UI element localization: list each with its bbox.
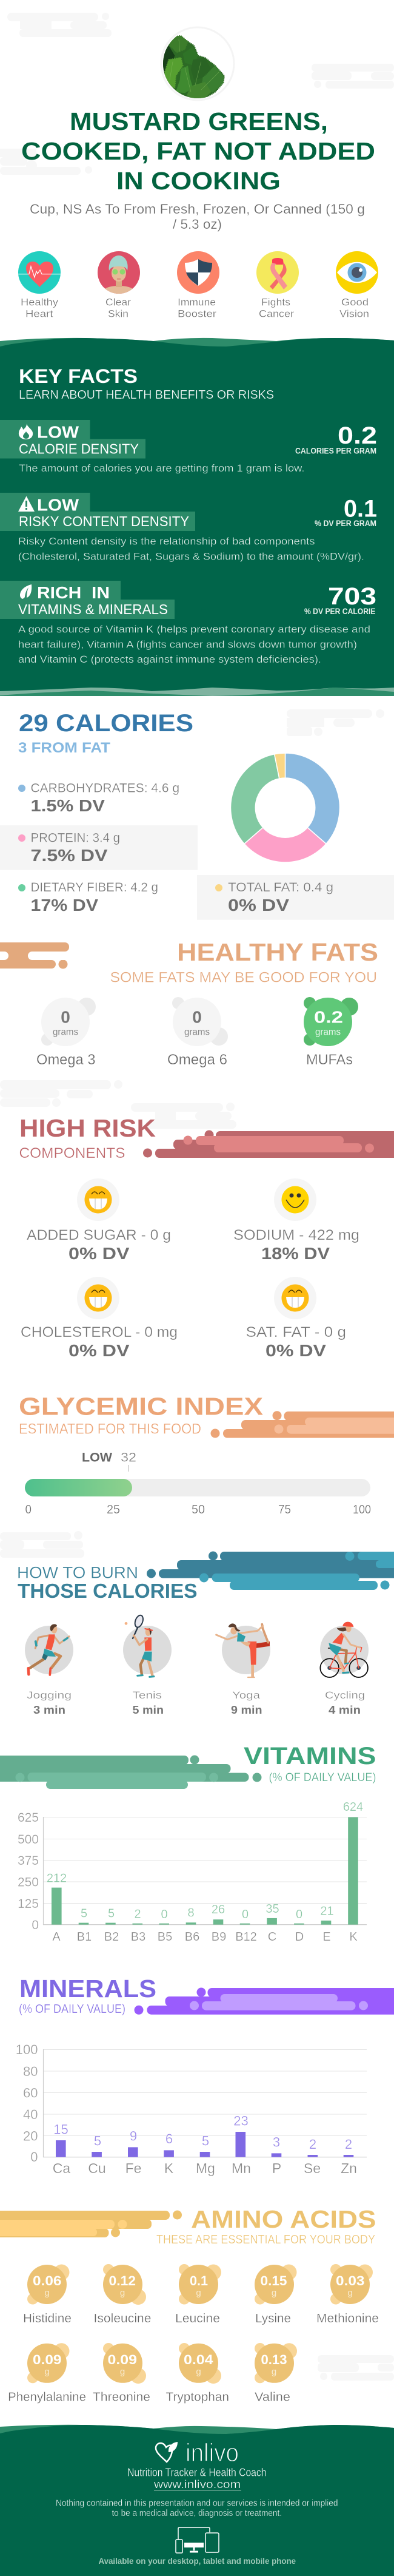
activity: jogging	[25, 1624, 73, 1675]
fact: low risky content density: RISKY CONTENT DENSITY	[19, 513, 189, 529]
bar chart: vitamins: D	[295, 1930, 304, 1944]
fat bubble: MUFAs: grams	[315, 1027, 341, 1038]
label: immune booster: Booster	[178, 308, 217, 319]
fat bubble: MUFAs: MUFAs	[306, 1052, 353, 1068]
fat bubble: omega 3: grams	[53, 1027, 78, 1038]
decorative header shape: vitamins	[0, 1755, 262, 1789]
fact: low calorie density: The amount of calories you are getting from 1 gram is low.	[19, 463, 304, 474]
amino acid: phenylalanine	[8, 2343, 86, 2404]
legend: protein: PROTEIN: 3.4 g	[30, 831, 120, 845]
icon: immune booster	[177, 251, 219, 294]
label: yoga	[231, 1689, 262, 1716]
bar chart: vitamins: C	[268, 1930, 276, 1944]
icon: healthy heart	[18, 251, 61, 294]
risk item: saturated fat: SAT. FAT - 0 g	[246, 1324, 346, 1340]
bar chart: vitamins: B12	[235, 1930, 257, 1944]
bar chart: minerals: 15	[53, 2122, 68, 2137]
heading: glycemic index: ESTIMATED FOR THIS FOOD	[19, 1421, 201, 1438]
bar chart: vitamins: B3	[131, 1930, 145, 1944]
bar chart: minerals	[16, 2042, 367, 2176]
risk item: added sugar	[27, 1178, 171, 1263]
bar chart: minerals: 6	[165, 2131, 173, 2146]
amino acid: phenylalanine: Phenylalanine	[8, 2391, 86, 2404]
amino acid: isoleucine: Isoleucine	[93, 2312, 152, 2325]
bar chart: minerals: 5	[202, 2134, 209, 2149]
bar chart: vitamins: 21	[320, 1904, 334, 1918]
amino acid: methionine: 0.03	[336, 2273, 365, 2288]
heading: 29 calories: 29 CALORIES	[19, 710, 193, 737]
amino acid: leucine: g	[196, 2288, 201, 2298]
label: good vision: Vision	[339, 308, 369, 319]
legend: dietary fiber: DIETARY FIBER: 4.2 g	[30, 881, 158, 894]
fact: low calorie density: 0.2	[338, 422, 377, 449]
label: immune booster	[178, 297, 217, 319]
bar chart: vitamins: 0	[242, 1908, 249, 1921]
footer tagline and link: Nutrition Tracker & Health Coach	[127, 2466, 267, 2478]
bar chart: vitamins: 0	[32, 1918, 39, 1932]
bar chart: vitamins: B9	[212, 1930, 226, 1944]
fact: low calorie density: CALORIES PER GRAM	[295, 447, 376, 455]
fact: rich in vitamins and minerals: 703	[328, 583, 376, 610]
fat bubble: MUFAs	[304, 997, 358, 1068]
heading: glycemic index: GLYCEMIC INDEX	[19, 1393, 263, 1421]
label: yoga: 9 min	[231, 1704, 262, 1716]
fat bubble: omega 6: grams	[184, 1027, 210, 1038]
heading: key facts: LEARN ABOUT HEALTH BENEFITS OR RISKS	[19, 388, 274, 402]
logo: inlivo	[156, 2438, 239, 2467]
bar chart: minerals: Se	[304, 2160, 321, 2176]
label: cycling: Cycling	[325, 1689, 365, 1701]
gauge: glycemic index value: 100	[353, 1503, 371, 1516]
fact: low risky content density	[0, 493, 377, 562]
bar chart: minerals: 20	[23, 2129, 38, 2143]
amino acid: lysine: g	[272, 2288, 276, 2298]
label: good vision: Good	[341, 297, 369, 308]
bar chart: vitamins: 375	[18, 1854, 39, 1868]
amino acid: isoleucine	[93, 2264, 152, 2325]
risk item: cholesterol: 0% DV	[68, 1341, 130, 1360]
label: jogging	[27, 1689, 72, 1716]
bar chart: vitamins: E	[322, 1930, 331, 1944]
bar chart: vitamins: 35	[265, 1902, 279, 1916]
disclaimer: to be a medical advice, diagnosis or treatment.	[112, 2509, 282, 2518]
heading: vitamins	[244, 1743, 376, 1784]
fat bubble: omega 3: Omega 3	[36, 1052, 96, 1068]
fat bubble: omega 3: 0	[61, 1008, 70, 1027]
bar chart: vitamins: 5	[108, 1907, 115, 1920]
amino acid: leucine: Leucine	[175, 2312, 220, 2325]
bar chart: minerals: 40	[23, 2107, 38, 2122]
amino acid: histidine	[23, 2265, 72, 2325]
fat bubble: omega 6: Omega 6	[167, 1052, 227, 1068]
fat bubble: MUFAs: 0.2	[314, 1008, 343, 1027]
amino acid: histidine: Histidine	[23, 2312, 72, 2325]
legend: protein	[0, 825, 198, 870]
label: healthy heart: Heart	[25, 308, 53, 319]
heading: amino acids	[156, 2205, 376, 2246]
label: cycling: 4 min	[329, 1704, 361, 1716]
risk item: sodium: SODIUM - 422 mg	[233, 1227, 359, 1243]
risk item: cholesterol: CHOLESTEROL - 0 mg	[21, 1324, 178, 1340]
gauge: glycemic index value: 0	[25, 1503, 32, 1516]
fact: rich in vitamins and minerals: RICH IN	[37, 583, 110, 602]
amino acid: isoleucine: g	[120, 2288, 125, 2298]
panel: key facts	[0, 338, 394, 696]
decorative header shape: amino acids	[0, 2210, 182, 2237]
donut chart: calorie sources	[231, 753, 339, 862]
fact: low calorie density: LOW	[37, 422, 79, 442]
panel: footer	[0, 2425, 394, 2576]
decorative header shape: high risk	[143, 1130, 394, 1158]
bar chart: minerals: P	[272, 2160, 281, 2176]
bar chart: minerals: 0	[30, 2149, 38, 2165]
bar chart: minerals: 23	[233, 2114, 249, 2129]
fact: low calorie density: CALORIE DENSITY	[19, 441, 139, 456]
disclaimer	[56, 2499, 338, 2518]
title: IN COOKING	[116, 167, 281, 195]
bar chart: vitamins: 8	[187, 1907, 195, 1920]
amino acid: valine: Valine	[255, 2391, 290, 2404]
bar chart: minerals: 2	[345, 2137, 352, 2152]
subtitle: serving size: Cup, NS As To From Fresh, Frozen, Or Canned (150 g	[30, 201, 365, 217]
label: tennis	[132, 1689, 164, 1716]
label: good vision	[339, 297, 369, 319]
amino acid: tryptophan: g	[196, 2367, 201, 2377]
amino acid: methionine: Methionine	[316, 2312, 379, 2325]
bar chart: vitamins: 26	[212, 1903, 225, 1916]
amino acid: lysine: Lysine	[255, 2312, 291, 2325]
gauge: glycemic index value: LOW	[82, 1451, 112, 1465]
food photo: mustard greens	[161, 27, 234, 100]
legend: total fat: 0% DV	[228, 896, 289, 914]
legend: protein: 7.5% DV	[30, 846, 108, 865]
amino acid: threonine	[93, 2343, 150, 2404]
risk item: sodium	[233, 1178, 359, 1263]
fat bubble: omega 3	[36, 998, 96, 1068]
bar chart: minerals: 100	[16, 2042, 38, 2057]
fact: rich in vitamins and minerals: heart failure), Vitamin A (fights cancer and slows down tumor growth)	[18, 640, 357, 651]
gauge: glycemic index value: 50	[192, 1503, 205, 1516]
bar chart: vitamins: 125	[18, 1897, 39, 1911]
amino acid: phenylalanine: g	[44, 2367, 50, 2377]
heading: high risk	[19, 1114, 156, 1161]
label: clear skin: Clear	[105, 297, 132, 308]
amino acid: valine: g	[272, 2367, 276, 2377]
title: COOKED, FAT NOT ADDED	[21, 137, 375, 165]
label: clear skin	[105, 297, 132, 319]
risk item: added sugar: 0% DV	[68, 1244, 130, 1263]
heading: key facts: KEY FACTS	[19, 365, 138, 387]
fact: rich in vitamins and minerals: VITAMINS & MINERALS	[18, 601, 168, 617]
bar chart: minerals: 60	[23, 2085, 38, 2101]
risk item: saturated fat: 0% DV	[265, 1341, 326, 1360]
heading: healthy fats: HEALTHY FATS	[177, 938, 378, 966]
fact: low risky content density: % DV PER GRAM	[315, 519, 376, 528]
label: clear skin: Skin	[108, 308, 129, 319]
legend: carbohydrates	[18, 782, 179, 815]
bar chart: minerals: Fe	[125, 2160, 141, 2176]
bar chart: minerals: 9	[130, 2129, 137, 2144]
fact: rich in vitamins and minerals	[0, 581, 376, 665]
fact: low risky content density: (Cholesterol, Saturated Fat, Sugars & Sodium) to the amount (%DV/gr).	[18, 551, 364, 562]
heading: high risk: HIGH RISK	[19, 1114, 156, 1142]
activity: cycling	[320, 1622, 369, 1677]
label: tennis: Tenis	[132, 1689, 162, 1701]
heading: how to burn those calories	[17, 1563, 198, 1602]
legend: carbohydrates: CARBOHYDRATES: 4.6 g	[30, 782, 179, 796]
amino acid: threonine: 0.09	[108, 2352, 137, 2367]
heading: amino acids: THESE ARE ESSENTIAL FOR YOUR BODY	[156, 2233, 375, 2246]
gauge: glycemic index value: 32	[121, 1451, 136, 1465]
decorative header shape: glycemic index	[211, 1411, 394, 1438]
amino acid: leucine	[175, 2264, 221, 2325]
heading: how to burn those calories: THOSE CALORIES	[18, 1580, 198, 1602]
fat bubble: omega 6	[167, 997, 228, 1068]
label: jogging: Jogging	[27, 1689, 72, 1701]
label: fights cancer: Cancer	[259, 308, 295, 319]
amino acid: histidine: g	[44, 2288, 50, 2298]
amino acid: leucine: 0.1	[190, 2273, 208, 2288]
decorative header shape: healthy fats	[0, 942, 76, 969]
heading: vitamins: (% OF DAILY VALUE)	[269, 1771, 376, 1784]
subtitle: serving size	[30, 201, 365, 232]
bar chart: vitamins: 5	[81, 1907, 87, 1920]
amino acid: lysine	[255, 2265, 297, 2325]
decorative header shape: how to burn	[147, 1551, 394, 1590]
label: tennis: 5 min	[132, 1704, 164, 1716]
heading: healthy fats: SOME FATS MAY BE GOOD FOR YOU	[110, 970, 377, 986]
legend: total fat: TOTAL FAT: 0.4 g	[228, 881, 333, 894]
gauge: glycemic index value	[25, 1451, 371, 1516]
heading: high risk: COMPONENTS	[19, 1145, 125, 1161]
heading: minerals: (% OF DAILY VALUE)	[19, 2003, 125, 2016]
icon: fights cancer	[256, 251, 299, 294]
label: cycling	[325, 1689, 365, 1716]
bar chart: vitamins: A	[52, 1930, 61, 1944]
fact: rich in vitamins and minerals: and Vitamin C (protects against immune system deficiencies).	[18, 654, 321, 665]
heading: minerals: MINERALS	[19, 1975, 156, 2003]
fact: rich in vitamins and minerals: A good source of Vitamin K (helps prevent coronary artery disease and	[18, 624, 370, 635]
heading: vitamins: VITAMINS	[244, 1743, 376, 1770]
activity: yoga	[216, 1623, 270, 1677]
title	[21, 107, 375, 195]
label: fights cancer	[259, 297, 295, 319]
subtitle: serving size: / 5.3 oz)	[173, 217, 222, 232]
label: yoga: Yoga	[232, 1689, 261, 1701]
amino acid: valine: 0.13	[261, 2352, 287, 2367]
amino acid: valine	[255, 2343, 297, 2404]
availability note: Available on your desktop, tablet and mobile phone	[98, 2556, 296, 2566]
amino acid: threonine: g	[120, 2367, 125, 2377]
risk item: cholesterol	[21, 1277, 178, 1360]
gauge: glycemic index value: 25	[107, 1503, 120, 1516]
label: healthy heart: Healthy	[21, 297, 59, 308]
bar chart: minerals: 80	[23, 2064, 38, 2079]
heading: 29 calories: 3 FROM FAT	[18, 740, 110, 756]
bar chart: minerals: 3	[273, 2135, 280, 2150]
bar chart: minerals: Cu	[88, 2160, 106, 2176]
icon: good vision	[336, 251, 378, 294]
footer tagline and link	[127, 2466, 267, 2490]
amino acid: histidine: 0.06	[33, 2273, 62, 2288]
bar chart: vitamins: B6	[185, 1930, 199, 1944]
heading: key facts	[19, 365, 274, 402]
label: jogging: 3 min	[33, 1704, 65, 1716]
bar chart: vitamins: B5	[158, 1930, 172, 1944]
heading: glycemic index	[19, 1393, 263, 1438]
icon: clear skin	[98, 251, 140, 297]
heading: 29 calories	[18, 710, 193, 756]
risk item: saturated fat	[246, 1277, 346, 1360]
amino acid: threonine: Threonine	[93, 2391, 150, 2404]
amino acid: lysine: 0.15	[261, 2273, 287, 2288]
label: fights cancer: Fights	[261, 297, 290, 308]
fat bubble: omega 6: 0	[192, 1008, 202, 1027]
bar chart: vitamins: 624	[343, 1800, 363, 1814]
legend: dietary fiber	[18, 881, 158, 914]
amino acid: phenylalanine: 0.09	[33, 2352, 62, 2367]
heading: amino acids: AMINO ACIDS	[191, 2205, 376, 2233]
heading: healthy fats	[110, 938, 378, 986]
title: MUSTARD GREENS,	[70, 107, 328, 135]
heading: how to burn those calories: HOW TO BURN	[17, 1563, 138, 1581]
bar chart: vitamins: 625	[18, 1811, 39, 1825]
bar chart: vitamins	[18, 1800, 367, 1944]
heading: minerals	[19, 1975, 156, 2016]
bar chart: minerals: Zn	[341, 2160, 357, 2176]
risk item: sodium: 18% DV	[261, 1244, 330, 1263]
bar chart: vitamins: 0	[296, 1908, 302, 1921]
bar chart: vitamins: K	[349, 1930, 358, 1944]
legend: total fat	[197, 875, 394, 920]
label: immune booster: Immune	[178, 297, 216, 308]
bar chart: minerals: K	[164, 2160, 174, 2176]
amino acid: tryptophan	[166, 2343, 229, 2404]
legend: carbohydrates: 1.5% DV	[30, 796, 105, 815]
bar chart: minerals: 5	[94, 2134, 101, 2149]
bar chart: minerals: Mn	[232, 2160, 251, 2176]
bar chart: vitamins: B2	[104, 1930, 119, 1944]
activity: tennis	[123, 1614, 172, 1677]
risk item: added sugar: ADDED SUGAR - 0 g	[27, 1227, 171, 1243]
amino acid: isoleucine: 0.12	[109, 2273, 136, 2288]
amino acid: tryptophan: 0.04	[184, 2352, 213, 2367]
logo: inlivo: inlivo	[185, 2438, 239, 2467]
bar chart: minerals: Mg	[196, 2160, 215, 2176]
amino acid: methionine	[316, 2264, 379, 2325]
amino acid: tryptophan: Tryptophan	[166, 2391, 229, 2404]
icon: devices	[176, 2527, 219, 2553]
gauge: glycemic index value: 75	[278, 1503, 291, 1516]
legend: dietary fiber: 17% DV	[30, 896, 98, 914]
bar chart: vitamins: 2	[134, 1908, 141, 1921]
fact: rich in vitamins and minerals: % DV PER CALORIE	[304, 607, 376, 616]
bar chart: vitamins: B1	[77, 1930, 92, 1944]
bar chart: vitamins: 250	[18, 1875, 39, 1890]
bar chart: vitamins: 500	[18, 1833, 39, 1847]
label: healthy heart	[21, 297, 59, 319]
bar chart: vitamins: 212	[47, 1871, 67, 1885]
amino acid: methionine: g	[347, 2288, 353, 2298]
fact: low risky content density: 0.1	[344, 495, 377, 522]
bar chart: minerals: Ca	[53, 2160, 70, 2176]
fact: low risky content density: Risky Content density is the relationship of bad components	[18, 536, 315, 547]
bar chart: minerals: 2	[309, 2137, 316, 2152]
bar chart: vitamins: 0	[161, 1908, 168, 1921]
disclaimer: Nothing contained in this presentation and our services is intended or implied	[56, 2499, 338, 2509]
decorative header shape: minerals	[135, 1988, 394, 2015]
footer tagline and link: www.inlivo.com	[153, 2478, 241, 2490]
fact: low calorie density	[0, 420, 377, 474]
fact: low risky content density: LOW	[37, 495, 79, 515]
